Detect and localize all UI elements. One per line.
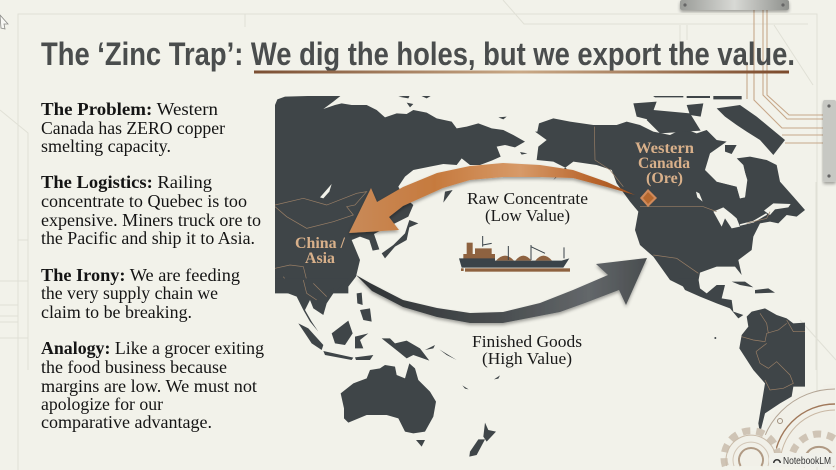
badge: NotebookLM bbox=[769, 453, 836, 467]
map: Asia bbox=[275, 95, 527, 293]
text block: the problem bbox=[41, 99, 225, 156]
label: finished goods: (High Value) bbox=[482, 349, 572, 368]
label: raw concentrate bbox=[467, 189, 588, 225]
label: Western Canada (Ore): (Ore) bbox=[646, 170, 683, 187]
gear: large bbox=[759, 389, 835, 465]
text block: the problem: smelting capacity. bbox=[41, 136, 171, 156]
text block: the logistics: the Pacific and ship it to Asia. bbox=[41, 228, 255, 248]
text block: the irony: the very supply chain we bbox=[41, 283, 218, 303]
text block: the irony: The Irony: We are feeding bbox=[41, 265, 240, 285]
label: China / Asia: China / bbox=[295, 235, 346, 252]
text block: the logistics: concentrate to Quebec is too bbox=[41, 191, 247, 211]
world map bbox=[275, 95, 805, 457]
label: Western Canada (Ore): Western bbox=[635, 140, 694, 157]
label: China / Asia: Asia bbox=[305, 250, 335, 267]
label: raw concentrate: (Low Value) bbox=[485, 206, 570, 225]
map: Central and South America bbox=[678, 278, 805, 433]
icon: cargo ship bbox=[459, 236, 570, 272]
circuit lines bbox=[747, 10, 823, 143]
label: China / Asia bbox=[295, 235, 346, 267]
text block: the logistics: The Logistics: Railing bbox=[41, 172, 212, 192]
label: finished goods bbox=[472, 332, 582, 368]
metal plate: top bbox=[680, 0, 789, 10]
text block: the logistics bbox=[41, 172, 261, 248]
map: Southeast Asia and Oceania bbox=[275, 278, 500, 457]
text block: the logistics: expensive. Miners truck ore to bbox=[41, 210, 261, 230]
text block: analogy: apologize for our bbox=[41, 394, 163, 414]
arrow: raw concentrate to Asia (copper) bbox=[349, 163, 635, 233]
map: North America bbox=[535, 95, 805, 290]
text block: analogy bbox=[41, 338, 264, 432]
gear: small left bbox=[724, 431, 778, 466]
cursor icon bbox=[0, 15, 8, 29]
label: Western Canada (Ore): Canada bbox=[638, 155, 690, 172]
text block: analogy: Analogy: Like a grocer exiting bbox=[41, 338, 264, 358]
arrow: finished goods to North America (dark) bbox=[356, 258, 647, 323]
label: finished goods: Finished Goods bbox=[472, 332, 582, 351]
text block: the irony bbox=[41, 265, 240, 322]
metal plate: right bbox=[823, 100, 836, 182]
text panel bbox=[41, 99, 264, 432]
text block: analogy: margins are low. We must not bbox=[41, 376, 257, 396]
text block: analogy: comparative advantage. bbox=[41, 412, 212, 432]
text block: analogy: the food business because bbox=[41, 357, 227, 377]
gears bbox=[724, 389, 835, 467]
text block: the irony: claim to be breaking. bbox=[41, 302, 192, 322]
label: Western Canada (Ore) bbox=[635, 140, 694, 187]
text block: the problem: Canada has ZERO copper bbox=[41, 118, 225, 138]
label: raw concentrate: Raw Concentrate bbox=[467, 189, 588, 208]
gear: small right bbox=[791, 434, 835, 467]
text block: the problem: The Problem: Western bbox=[41, 99, 218, 119]
icon: ore diamond bbox=[640, 189, 657, 207]
